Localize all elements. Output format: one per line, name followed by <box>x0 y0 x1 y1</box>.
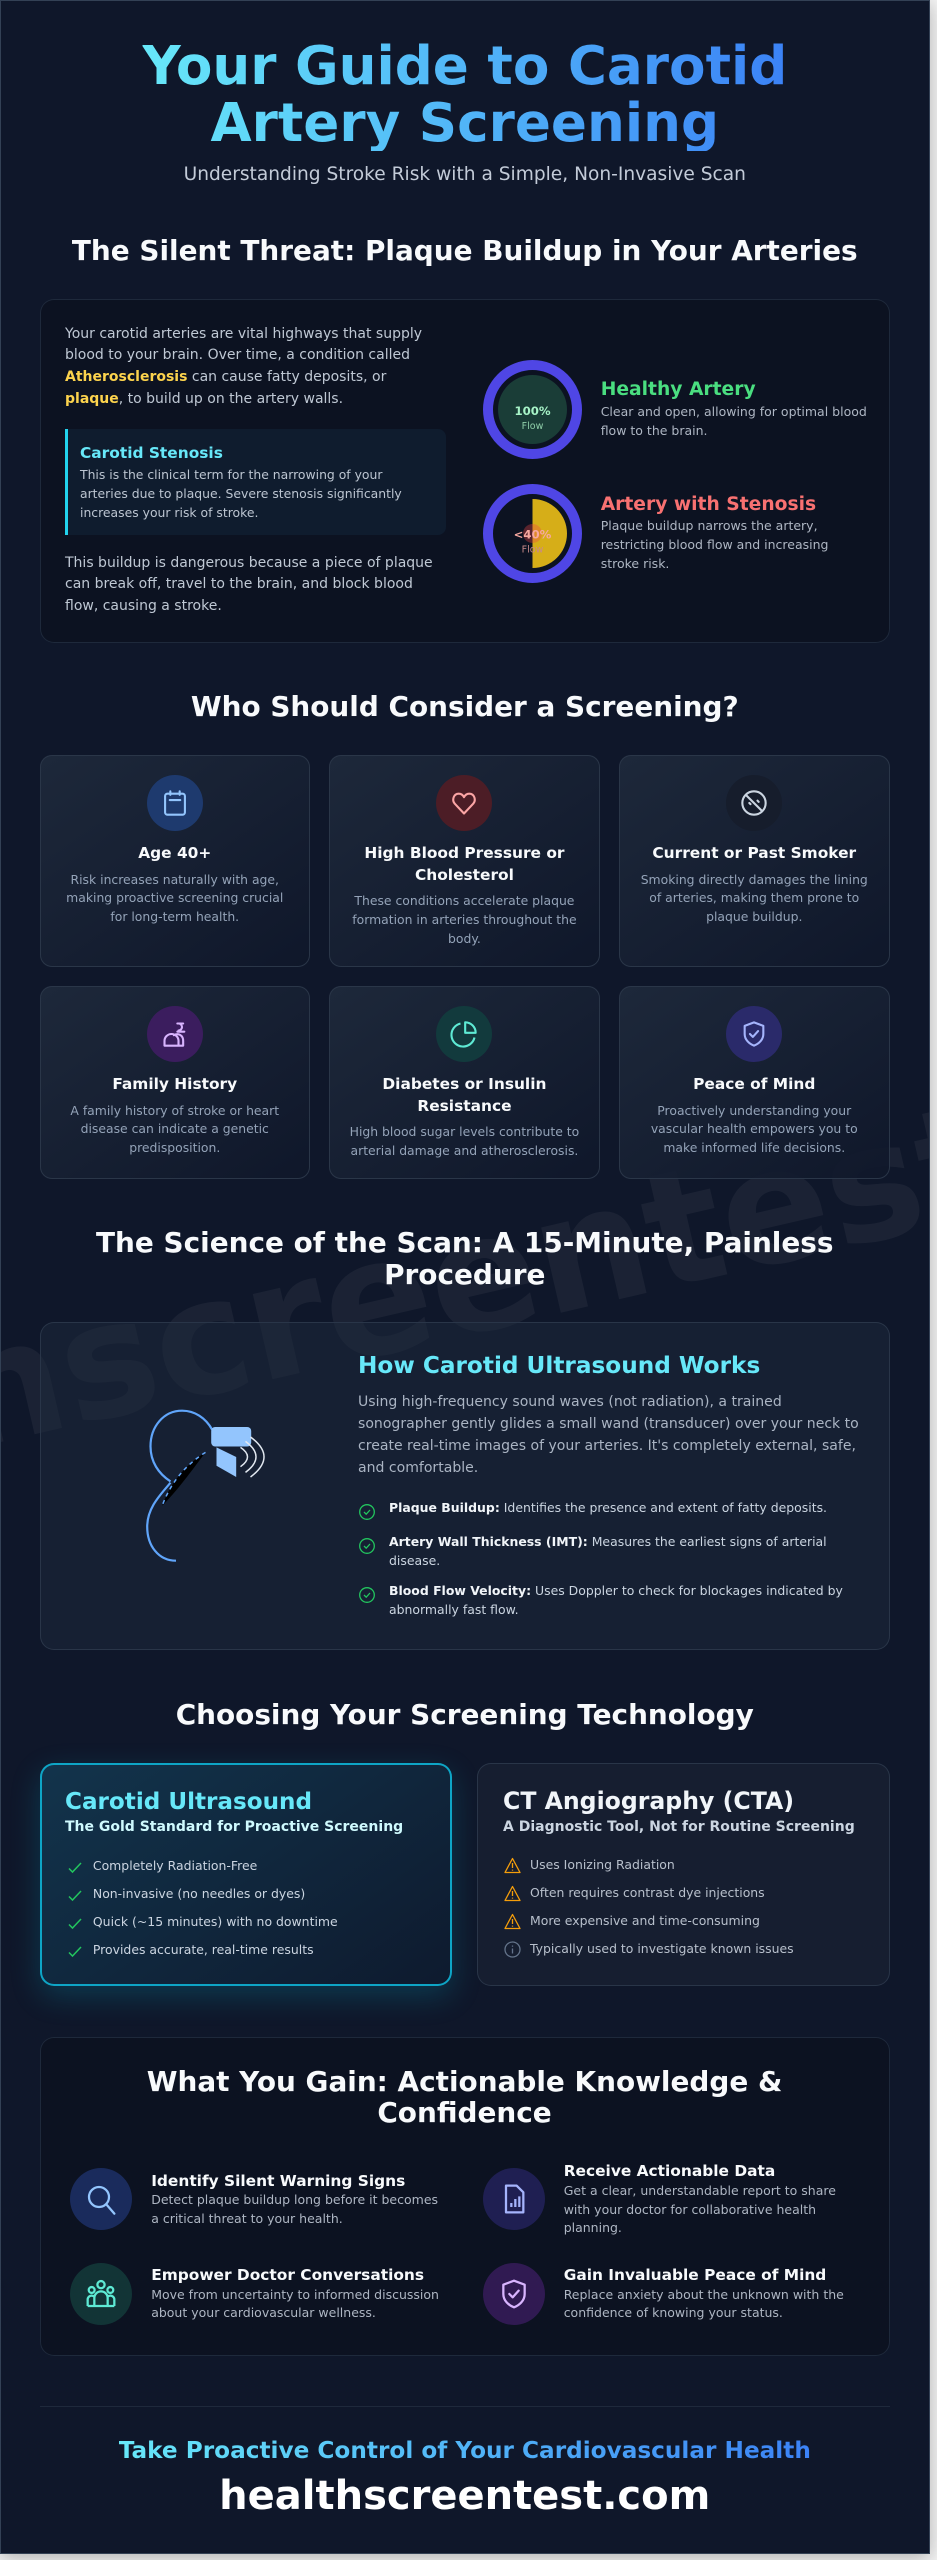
benefit text <box>151 2192 438 2226</box>
benefit heading: Gain Invaluable Peace of Mind <box>564 2266 826 2284</box>
panel text: Using high-frequency sound waves (not radiation), a trained <box>358 1394 782 1410</box>
card text <box>641 872 868 924</box>
list item: blood flow velocity: Blood Flow Velocity: Uses Doppler to check for blockages indicated by <box>389 1583 843 1598</box>
diagram: artery with stenosis: <40% <box>514 527 552 541</box>
card heading: Current or Past Smoker <box>652 844 856 862</box>
text: intro paragraph: blood to your brain. Over time, a condition called <box>65 347 410 363</box>
item: Non-invasive (no needles or dyes) <box>93 1886 305 1901</box>
list item: blood flow velocity <box>389 1583 843 1617</box>
benefit text <box>564 2287 844 2320</box>
panel: how ultrasound works <box>40 1322 890 1650</box>
card heading: Family History <box>112 1075 237 1093</box>
panel: blood pressure <box>329 755 600 967</box>
icon: warning <box>504 1886 521 1902</box>
panel: ct angiography <box>477 1763 890 1986</box>
text: danger paragraph: This buildup is dangerous because a piece of plaque <box>65 555 433 571</box>
list item: wall thickness <box>389 1534 827 1568</box>
icon: check <box>68 1918 82 1929</box>
card text: making proactive screening crucial <box>66 890 283 905</box>
benefit text: a critical threat to your health. <box>151 2211 343 2226</box>
text: danger paragraph <box>64 555 433 614</box>
diagram: artery with stenosis <box>483 484 582 583</box>
card heading: Age 40+ <box>138 844 211 862</box>
callout: carotid stenosis <box>65 429 446 535</box>
heading: science of the scan: Procedure <box>384 1258 545 1291</box>
icon: warning <box>504 1914 521 1930</box>
icon: warning <box>504 1858 521 1874</box>
benefit heading: Receive Actionable Data <box>564 2162 775 2180</box>
heading: science of the scan: The Science of the Scan: A 15-Minute, Painless <box>96 1226 833 1259</box>
benefit text: Replace anxiety about the unknown with the <box>564 2287 844 2302</box>
panel: silent threat <box>40 299 890 643</box>
benefit text: with your doctor for collaborative health <box>564 2202 816 2217</box>
text: stenosis description: stroke risk. <box>601 556 669 571</box>
callout text: increases your risk of stroke. <box>80 505 258 520</box>
icon: check <box>68 1862 82 1873</box>
card text: make informed life decisions. <box>663 1140 845 1155</box>
icon: calendar <box>147 775 203 831</box>
panel heading: Confidence <box>377 2096 552 2129</box>
card text: vascular health empowers you to <box>651 1121 858 1136</box>
footer website: healthscreentest.com <box>219 2472 710 2518</box>
heading: choosing technology: Choosing Your Screening Technology <box>176 1698 754 1731</box>
heading: science of the scan <box>96 1226 833 1291</box>
card text: Proactively understanding your <box>657 1102 851 1118</box>
panel heading: How Carotid Ultrasound Works <box>358 1352 760 1379</box>
title: Your Guide to Carotid <box>142 35 787 97</box>
card text: A family history of stroke or heart <box>70 1102 279 1118</box>
card text: body. <box>448 931 481 946</box>
icon: report <box>483 2168 545 2230</box>
text: intro paragraph: Atherosclerosis can cause fatty deposits, or <box>65 369 386 385</box>
panel: diabetes <box>329 986 600 1179</box>
benefit text: Get a clear, understandable report to share <box>564 2183 836 2198</box>
item: Typically used to investigate known issues <box>530 1941 794 1956</box>
list item: wall thickness: Artery Wall Thickness (IMT): Measures the earliest signs of arterial <box>389 1534 827 1549</box>
panel: family history <box>40 986 310 1179</box>
card text <box>651 1102 858 1155</box>
benefit text: Detect plaque buildup long before it becomes <box>151 2192 438 2207</box>
footer tagline: Take Proactive Control of Your Cardiovascular Health <box>119 2437 811 2464</box>
card text: High blood sugar levels contribute to <box>350 1124 579 1139</box>
item: Provides accurate, real-time results <box>93 1942 314 1957</box>
text: healthy artery description: Clear and open, allowing for optimal blood <box>601 404 867 419</box>
panel heading: What You Gain: Actionable Knowledge & <box>147 2065 782 2098</box>
item: Uses Ionizing Radiation <box>530 1857 675 1872</box>
benefit heading: Identify Silent Warning Signs <box>151 2172 405 2190</box>
icon: people <box>70 2263 132 2325</box>
card text: for long-term health. <box>110 909 239 924</box>
panel: carotid ultrasound <box>40 1763 452 1986</box>
callout text: This is the clinical term for the narrowing of your <box>80 467 382 482</box>
callout heading: Carotid Stenosis <box>80 444 223 462</box>
text: healthy artery description <box>601 404 867 438</box>
benefit text <box>151 2287 439 2320</box>
card text: Risk increases naturally with age, <box>70 872 279 886</box>
benefit text: planning. <box>564 2220 622 2235</box>
diagram: healthy artery: 100% <box>514 404 551 418</box>
panel text <box>358 1394 859 1476</box>
card text: plaque buildup. <box>706 909 802 924</box>
text: stenosis description: restricting blood flow and increasing <box>601 537 828 552</box>
item: Completely Radiation-Free <box>93 1858 257 1873</box>
card heading: High Blood Pressure or <box>364 844 565 862</box>
card heading: CT Angiography (CTA) <box>503 1787 794 1815</box>
icon: pie chart <box>436 1006 492 1062</box>
text: healthy artery description: flow to the brain. <box>601 423 708 438</box>
panel: what you gain <box>40 2037 890 2356</box>
diagram: healthy artery: Flow <box>522 421 544 432</box>
icon: shield <box>483 2263 545 2325</box>
benefit heading: Empower Doctor Conversations <box>151 2266 424 2284</box>
panel: peace of mind <box>619 986 890 1179</box>
diagram: artery with stenosis: Flow <box>522 545 544 556</box>
list: drawbacks <box>504 1857 794 1958</box>
card text: These conditions accelerate plaque <box>354 893 574 908</box>
icon: shield <box>726 1006 782 1062</box>
card heading: Cholesterol <box>415 866 514 884</box>
card subheading: A Diagnostic Tool, Not for Routine Screening <box>503 1819 855 1835</box>
list item: plaque buildup: Plaque Buildup: Identifies the presence and extent of fatty deposits. <box>389 1500 827 1515</box>
heading: the silent threat: The Silent Threat: Plaque Buildup in Your Arteries <box>72 234 858 267</box>
label: healthy artery: Healthy Artery <box>601 379 756 400</box>
title: Artery Screening <box>210 92 719 154</box>
icon: check <box>68 1890 82 1901</box>
list item: wall thickness: disease. <box>389 1553 440 1568</box>
panel heading <box>147 2065 782 2129</box>
icon: heart <box>436 775 492 831</box>
callout text <box>80 467 402 520</box>
card heading: Resistance <box>417 1097 512 1115</box>
icon: check <box>359 1587 375 1603</box>
text: intro paragraph: plaque, to build up on the artery walls. <box>65 391 343 407</box>
card subheading: The Gold Standard for Proactive Screening <box>65 1819 403 1835</box>
list item: blood flow velocity: abnormally fast flow. <box>389 1602 519 1617</box>
icon: search <box>70 2168 132 2230</box>
card text <box>70 1102 279 1155</box>
card heading <box>364 844 565 884</box>
card text: Smoking directly damages the lining <box>641 872 868 886</box>
card text <box>352 893 577 946</box>
icon: family <box>147 1006 203 1062</box>
text: stenosis description <box>601 518 828 571</box>
card text <box>66 872 283 924</box>
panel text: create real-time images of your arteries. It's completely external, safe, <box>358 1438 856 1454</box>
panel: age 40+ <box>40 755 310 967</box>
text: danger paragraph: can break off, travel to the brain, and block blood <box>65 576 413 592</box>
benefit text: confidence of knowing your status. <box>564 2305 783 2320</box>
panel: smoker <box>619 755 890 967</box>
subtitle: Understanding Stroke Risk with a Simple, Non-Invasive Scan <box>184 164 746 185</box>
icon: check <box>359 1504 375 1520</box>
benefit text: Move from uncertainty to informed discussion <box>151 2287 439 2302</box>
title <box>142 38 787 151</box>
icon: check <box>359 1538 375 1554</box>
icon: info <box>504 1941 521 1958</box>
card text: of arteries, making them prone to <box>649 890 859 905</box>
label: artery with stenosis: Artery with Stenosis <box>601 494 816 515</box>
card heading: Carotid Ultrasound <box>65 1789 312 1815</box>
item: Quick (~15 minutes) with no downtime <box>93 1914 338 1929</box>
card heading <box>382 1075 546 1115</box>
panel text: and comfortable. <box>358 1460 478 1476</box>
card text <box>350 1124 579 1158</box>
icon: no smoking <box>726 775 782 831</box>
callout text: arteries due to plaque. Severe stenosis significantly <box>80 486 402 501</box>
benefit text <box>564 2183 836 2235</box>
illustration: neck and transducer <box>146 1410 265 1562</box>
heading: who should screen: Who Should Consider a Screening? <box>191 690 739 723</box>
diagram: healthy artery <box>483 360 582 459</box>
card text: formation in arteries throughout the <box>352 912 577 927</box>
text: stenosis description: Plaque buildup narrows the artery, <box>601 518 818 533</box>
benefit text: about your cardiovascular wellness. <box>151 2305 376 2320</box>
card heading: Peace of Mind <box>693 1075 815 1093</box>
item: Often requires contrast dye injections <box>530 1885 765 1900</box>
card text: predisposition. <box>129 1140 220 1155</box>
card text: disease can indicate a genetic <box>81 1121 269 1136</box>
text: danger paragraph: flow, causing a stroke. <box>65 598 222 614</box>
text: intro paragraph <box>65 326 422 407</box>
list: benefits <box>68 1858 338 1957</box>
card heading: Diabetes or Insulin <box>382 1075 546 1093</box>
icon: check <box>68 1946 82 1957</box>
item: More expensive and time-consuming <box>530 1913 760 1928</box>
panel text: sonographer gently glides a small wand (transducer) over your neck to <box>358 1416 859 1432</box>
card text: arterial damage and atherosclerosis. <box>351 1143 578 1158</box>
text: intro paragraph: Your carotid arteries are vital highways that supply <box>65 326 422 342</box>
